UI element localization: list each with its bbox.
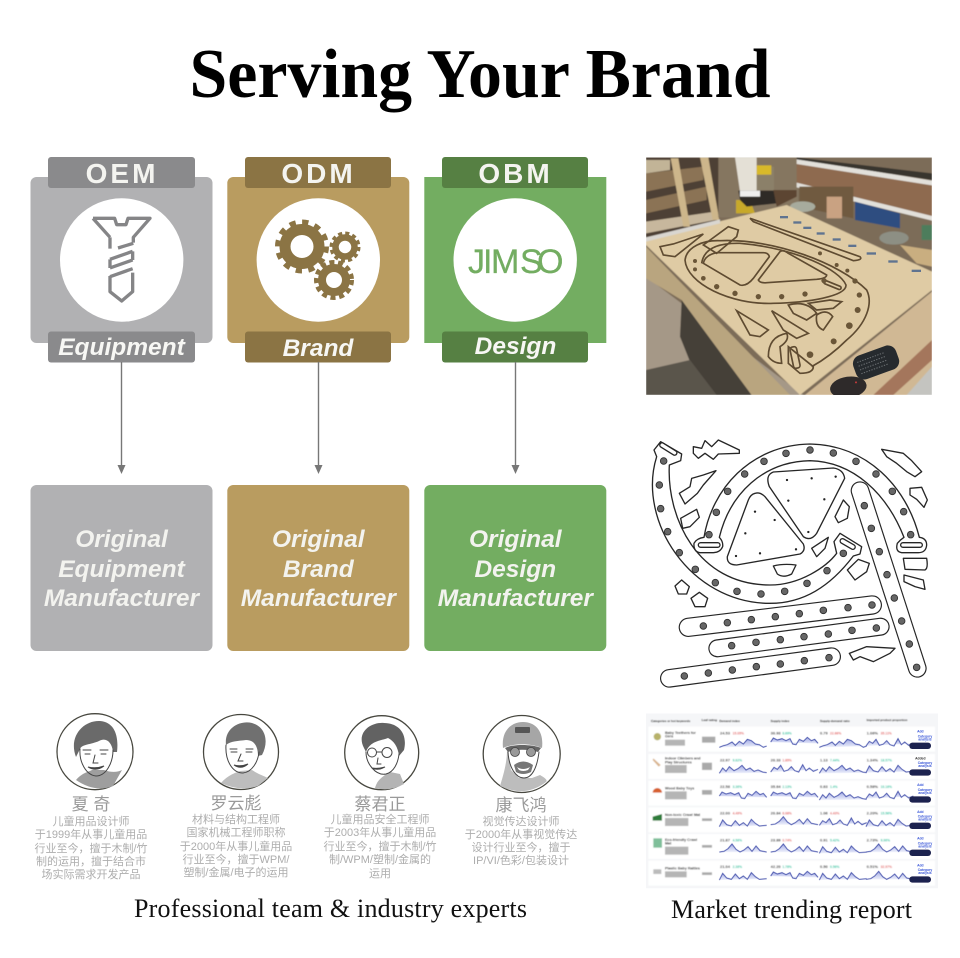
title: Serving Your Brand	[190, 36, 771, 113]
OEM top tab	[48, 157, 195, 189]
OBM top tab: OBM	[478, 158, 553, 189]
OBM top tab	[442, 157, 588, 189]
thumbnails	[653, 733, 662, 874]
values: 0.51%	[867, 864, 878, 869]
action buttons: Add	[917, 810, 924, 814]
bio: 国家机械工程师职称	[186, 825, 286, 839]
portrait	[204, 714, 278, 790]
action buttons: analysis	[918, 738, 932, 742]
card: Original Design Manufacturer: Manufacturer	[438, 585, 594, 612]
chart: market trend table: 1.4%	[830, 785, 838, 789]
team member: Xia Qi	[34, 714, 148, 881]
chart: market trend table: 18.57%	[881, 758, 892, 762]
bio: 于2003年从事儿童用品	[324, 825, 436, 839]
values: 22.97	[720, 757, 731, 762]
values: 20.84	[771, 811, 781, 816]
values: 0.50	[820, 864, 829, 869]
action buttons: analysis	[918, 764, 932, 768]
action buttons: Added	[915, 756, 926, 760]
values: 21.04	[720, 864, 731, 869]
name: 夏 奇	[72, 795, 110, 814]
action buttons: analysis	[918, 791, 932, 795]
bio: 场实际需求开发产品	[42, 867, 140, 881]
values: 23.89	[771, 837, 781, 842]
values: 20.33	[771, 757, 781, 762]
action buttons: Category	[918, 788, 932, 792]
team member: Cai Junzheng	[323, 716, 437, 880]
values	[720, 731, 878, 869]
icon: screw	[93, 218, 150, 301]
caption: team: Professional team & industry experts	[134, 894, 527, 923]
chart: market trend table: 3.36%	[733, 785, 742, 789]
chart: market trend table: 1.78%	[782, 865, 792, 869]
row names: Eco-friendly Crawl	[665, 838, 697, 842]
bio: 塑制/金属/电子的运用	[183, 865, 289, 879]
table header: Categories or hot keywords	[651, 719, 691, 723]
values: 35.64	[771, 784, 781, 789]
bio: IP/VI/色彩/包装设计	[473, 853, 569, 867]
action buttons: Category	[918, 868, 932, 872]
ODM top tab: ODM	[281, 158, 356, 189]
Brand tab	[245, 332, 391, 362]
row names	[665, 731, 701, 870]
card: Original Design Manufacturer: Original	[469, 526, 563, 553]
row names: Wood Baby Toys	[665, 786, 694, 790]
chart: market trend table: 0.56%	[830, 865, 839, 869]
action buttons: Add	[917, 863, 924, 867]
values: 1.34%	[867, 757, 878, 762]
row names: Plastic Baby Rattles	[665, 866, 700, 870]
values: 2.73%	[867, 837, 878, 842]
bars	[669, 491, 917, 678]
bio: 于1999年从事儿童用品	[35, 827, 147, 841]
bio: 设计行业至今，擅于	[472, 840, 570, 854]
team member: Kang Feihong	[465, 716, 577, 867]
chart: market trend table: 22.66%	[830, 732, 841, 736]
bio: 制的运用，擅于结合市	[36, 854, 146, 868]
card: Original Design Manufacturer	[424, 485, 606, 651]
chart: market trend table: 9.62%	[733, 758, 742, 762]
photo: CNC router table	[646, 157, 932, 400]
chart: market trend table: 15.56%	[881, 812, 892, 816]
bio	[323, 812, 437, 880]
values: 0.91	[820, 837, 829, 842]
bio	[34, 814, 148, 881]
action buttons: Category	[918, 841, 932, 845]
bio: 行业至今，擅于WPM/	[183, 852, 290, 866]
table header: Demand index	[719, 719, 740, 723]
row names: Indoor Climbers and	[665, 757, 701, 761]
Equipment tab: Equipment	[58, 334, 186, 361]
values: 1.13	[820, 757, 829, 762]
panel: ODM	[227, 157, 409, 362]
drawing: cut-out parts layout	[652, 440, 927, 679]
bio: 于2000年从事儿童用品	[180, 839, 292, 853]
table header: Leaf rating	[702, 718, 717, 722]
card: Original Equipment Manufacturer	[30, 485, 212, 651]
table header	[651, 718, 907, 723]
table header: Imported product proportion	[867, 718, 907, 722]
ODM top tab	[245, 157, 391, 189]
icon: gears	[278, 222, 358, 298]
table header: Supply index	[771, 719, 790, 723]
chart: market trend table: 4.49%	[733, 812, 742, 816]
values: 1.06	[820, 811, 829, 816]
chart: market trend table: 35.11%	[881, 732, 892, 736]
chart: market trend table: 4.43%	[830, 812, 839, 816]
action buttons: analysis	[918, 871, 932, 875]
name: 罗云彪	[210, 794, 262, 813]
chart: market trend table: 8.69%	[782, 732, 792, 736]
name: 康飞鸿	[496, 796, 546, 815]
card: Original Equipment Manufacturer: Equipment	[58, 556, 186, 583]
chart: market trend table: 4.58%	[733, 838, 742, 842]
bio	[465, 814, 577, 867]
Design tab	[442, 332, 588, 362]
action buttons: Category	[918, 815, 932, 819]
chart: market trend table: 1.85%	[782, 758, 792, 762]
sparklines	[719, 737, 913, 880]
chart: market trend table: 5.42%	[830, 838, 839, 842]
row names: Mat	[665, 842, 672, 846]
card: Original Brand Manufacturer: Brand	[283, 556, 355, 583]
values: 30.93	[771, 731, 781, 736]
team member: Luo Yunbiao	[180, 714, 292, 879]
arrow: ODM	[314, 362, 322, 474]
action buttons: Category	[918, 761, 932, 765]
chart: market trend table: 7.44%	[830, 758, 839, 762]
chart: market trend table: 6.08%	[782, 812, 792, 816]
Design tab: Design	[475, 333, 556, 360]
chart: market trend table: 9.96%	[881, 838, 890, 842]
values: 0.58%	[867, 784, 878, 789]
values: 2.20%	[867, 811, 878, 816]
action buttons: Add	[917, 783, 924, 787]
arrow: OEM	[118, 362, 126, 474]
chart: market trend table: 10.16%	[881, 785, 892, 789]
card: Original Brand Manufacturer	[227, 485, 409, 651]
values: 0.79	[820, 731, 829, 736]
caption: market report: Market trending report	[671, 895, 913, 924]
bio: 儿童用品安全工程师	[330, 812, 430, 826]
drill holes	[656, 447, 920, 679]
bio	[180, 812, 292, 879]
row names: Girls	[665, 735, 673, 739]
chart: market trend table: 2.13%	[782, 785, 792, 789]
card: Original Brand Manufacturer: Manufacturer	[241, 585, 397, 612]
card: Original Equipment Manufacturer: Original	[75, 526, 169, 553]
bio: 材料与结构工程师	[192, 812, 280, 826]
small parts	[659, 442, 678, 456]
row names: Baby Teethers for	[665, 731, 696, 735]
bio: 于2000年从事视觉传达	[465, 827, 577, 841]
table header: Supply-demand ratio	[820, 719, 850, 723]
Brand tab: Brand	[283, 335, 354, 362]
bio: 行业至今，擅于木制/竹	[34, 841, 148, 855]
values: 0.63	[820, 784, 829, 789]
row names: Non-toxic Crawl Mat	[665, 813, 701, 817]
arrow: OBM	[512, 362, 520, 474]
OEM top tab: OEM	[86, 158, 158, 189]
values: 1.06%	[867, 731, 878, 736]
values: 22.00	[720, 811, 731, 816]
values: 42.20	[771, 864, 781, 869]
action buttons: Add	[917, 730, 924, 734]
chart: market trend table: 32.97%	[881, 865, 892, 869]
action buttons	[909, 730, 932, 883]
chart: market trend table	[646, 713, 938, 888]
action buttons: Category	[918, 735, 932, 739]
bio: 行业至今，擅于木制/竹	[323, 839, 437, 853]
card: Original Equipment Manufacturer: Manufacturer	[44, 585, 201, 612]
action buttons: analysis	[918, 818, 932, 822]
panel: OBM	[424, 157, 606, 362]
chart: market trend table: 0.74%	[782, 838, 792, 842]
values: 24.53	[720, 731, 731, 736]
bio: 运用	[369, 867, 391, 880]
top arc band	[694, 444, 927, 553]
chart: market trend table: 2.38%	[733, 865, 742, 869]
values: 22.58	[720, 784, 731, 789]
card: Original Design Manufacturer: Design	[474, 556, 556, 583]
panel: OEM	[30, 157, 212, 362]
bottom arc band	[652, 442, 862, 603]
portrait	[57, 714, 133, 790]
row names: Play Structures	[665, 760, 692, 764]
bio: 视觉传达设计师	[482, 814, 560, 828]
values: 21.87	[720, 837, 731, 842]
bio: 制/WPM/塑制/金属的	[329, 852, 431, 866]
portrait	[483, 716, 560, 792]
card: Original Brand Manufacturer: Original	[272, 526, 366, 553]
action buttons: Add	[917, 836, 924, 840]
bio: 儿童用品设计师	[52, 814, 130, 828]
name: 蔡君正	[354, 795, 406, 814]
action buttons: analysis	[918, 844, 932, 848]
chart: market trend table: 15.05%	[733, 732, 744, 736]
logo: JIMSO: JIMSO	[468, 243, 563, 281]
portrait	[345, 716, 419, 790]
